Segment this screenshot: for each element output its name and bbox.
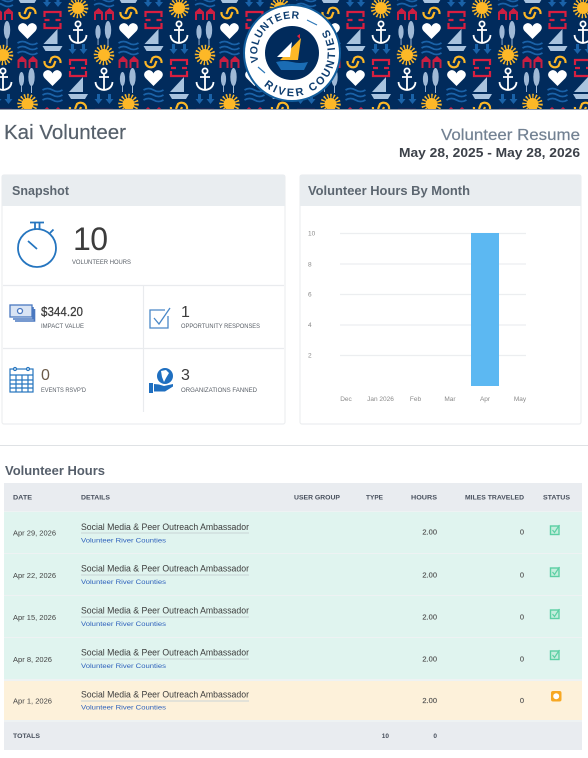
row: Apr 15: [4, 596, 582, 637]
row: Apr 29: Social Media & Peer Outreach Ambassador: [81, 522, 249, 532]
y axis labels: 8: [308, 262, 312, 268]
snapshot header: Snapshot: [12, 183, 70, 198]
table header: USER GROUP: [294, 494, 341, 502]
row: Apr 1 pending: Apr 1, 2026: [13, 698, 52, 706]
heading: resume label and date range: [399, 127, 580, 160]
x axis labels: Feb: [410, 396, 421, 403]
row: Apr 8: [4, 638, 582, 679]
heading: resume label and date range: Volunteer Resume: [441, 127, 580, 144]
table header: TYPE: [366, 494, 384, 502]
x axis labels: May: [514, 396, 527, 403]
row: Apr 22: Apr 22, 2026: [13, 573, 56, 580]
totals row: [4, 722, 582, 750]
row: Apr 29: 2.00: [422, 528, 437, 536]
y axis labels: 4: [308, 322, 312, 329]
row: Apr 29: 0: [520, 528, 524, 536]
row: Apr 15: Social Media & Peer Outreach Ambassador: [81, 606, 249, 616]
panel: volunteer hours by month: [300, 175, 581, 424]
totals row: TOTALS: [13, 733, 41, 740]
row: Apr 8: Social Media & Peer Outreach Ambassador: [81, 648, 249, 658]
stat: events rsvp'd: [41, 367, 87, 394]
totals row: 0: [433, 733, 437, 740]
y axis labels: 2: [308, 352, 312, 360]
heading: volunteer hours: Volunteer Hours: [5, 464, 105, 478]
stat: events rsvp'd: 0: [41, 367, 50, 384]
banner: patterned header: [0, 0, 588, 110]
row: Apr 8: Volunteer River Counties: [81, 663, 167, 670]
row: Apr 29: [4, 512, 582, 553]
stat: opportunity responses: [181, 304, 260, 330]
x axis labels: [340, 396, 527, 403]
stat: opportunity responses: 1: [181, 304, 190, 321]
row: Apr 15: 0: [520, 612, 524, 622]
row: Apr 22: Social Media & Peer Outreach Ambassador: [81, 564, 249, 574]
row: Apr 22: 2.00: [422, 570, 437, 580]
icon: calendar: [10, 368, 33, 392]
y axis labels: [308, 230, 316, 360]
stat: impact value: [41, 305, 84, 330]
row: Apr 1 pending: [4, 681, 582, 720]
stat: volunteer hours: VOLUNTEER HOURS: [72, 260, 131, 266]
row: Apr 15: Apr 15, 2026: [13, 615, 56, 622]
table: volunteer hours: [4, 483, 582, 750]
table header: MILES TRAVELED: [465, 494, 524, 502]
icon: pending clock: [551, 691, 562, 702]
row: Apr 1 pending: 2.00: [422, 696, 437, 705]
icon: stopwatch: [18, 222, 56, 267]
stat: impact value: IMPACT VALUE: [41, 324, 84, 330]
title: volunteer name: Kai Volunteer: [4, 122, 126, 144]
row: Apr 8: 2.00: [422, 654, 437, 664]
bar: April: [471, 233, 499, 386]
totals row: 10: [382, 733, 389, 740]
panel: snapshot: [2, 175, 285, 424]
stat: organizations fanned: 3: [181, 367, 190, 384]
table header: HOURS: [411, 494, 438, 502]
stat: events rsvp'd: EVENTS RSVP'D: [41, 388, 87, 394]
x axis labels: Apr: [480, 396, 491, 403]
stat: volunteer hours: 10: [73, 221, 108, 257]
stat: organizations fanned: ORGANIZATIONS FANNED: [181, 388, 258, 394]
row: Apr 29: Apr 29, 2026: [13, 530, 56, 538]
x axis labels: Dec: [340, 396, 353, 403]
x axis labels: Mar: [444, 396, 456, 403]
logo: Volunteer River Counties badge: RIVER COUNTIES: [264, 30, 336, 96]
chart header: Volunteer Hours By Month: [308, 183, 470, 198]
x axis labels: Jan 2026: [367, 396, 394, 403]
snapshot header: [2, 175, 285, 206]
bar chart: [308, 230, 527, 403]
logo: Volunteer River Counties badge: [243, 4, 341, 102]
table header: STATUS: [543, 494, 571, 502]
y axis labels: 10: [308, 230, 316, 238]
row: Apr 1 pending: 0: [520, 696, 524, 705]
icon: check box: [150, 308, 170, 328]
stat: volunteer hours: [72, 221, 131, 266]
row: Apr 29: Volunteer River Counties: [81, 538, 167, 544]
row: Apr 22: 0: [520, 570, 524, 580]
table header: DETAILS: [81, 494, 111, 502]
row: Apr 1 pending: Volunteer River Counties: [81, 704, 167, 712]
table header: DATE: [13, 494, 33, 502]
stat: organizations fanned: [181, 367, 258, 394]
row: Apr 22: [4, 554, 582, 595]
row: Apr 8: Apr 8, 2026: [13, 657, 52, 664]
row: Apr 15: 2.00: [422, 612, 437, 622]
row: Apr 8: 0: [520, 654, 524, 664]
chart header: [300, 175, 581, 206]
table header: [4, 483, 582, 511]
icon: globe in hand: [149, 368, 173, 393]
row: Apr 22: Volunteer River Counties: [81, 579, 167, 586]
row: Apr 1 pending: Social Media & Peer Outreach Ambassador: [81, 690, 249, 700]
stat: impact value: $344.20: [41, 305, 83, 319]
row: Apr 15: Volunteer River Counties: [81, 621, 167, 628]
icon: money: [10, 305, 34, 321]
stat: opportunity responses: OPPORTUNITY RESPONSES: [181, 324, 260, 330]
y axis labels: 6: [308, 292, 312, 298]
logo: Volunteer River Counties badge: VOLUNTEER: [250, 11, 299, 64]
heading: resume label and date range: May 28, 2025 - May 28, 2026: [399, 146, 580, 160]
